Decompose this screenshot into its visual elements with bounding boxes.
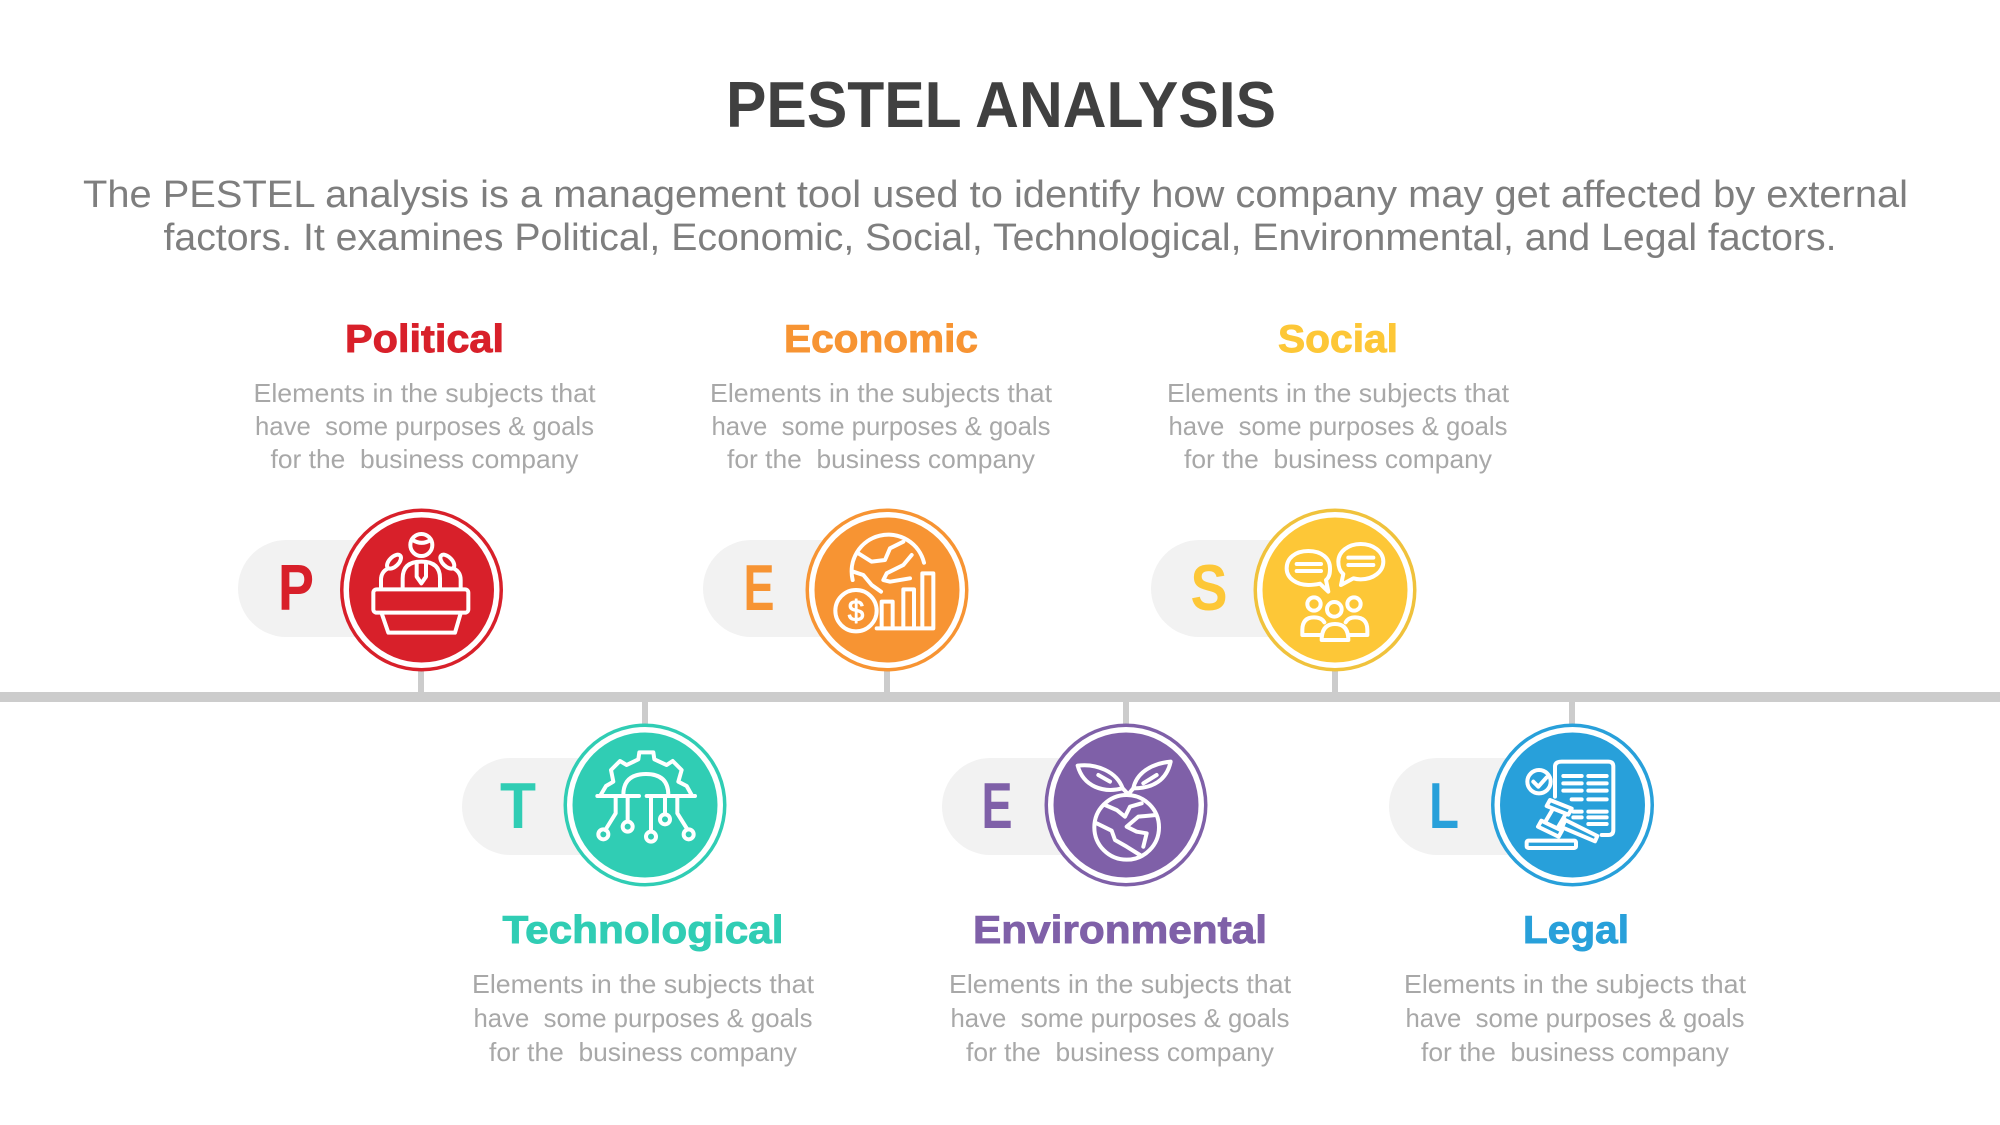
subtitle paragraph xyxy=(83,174,1908,259)
description: Legal: have some purposes & goals xyxy=(1406,1003,1744,1033)
panel: Economic xyxy=(703,318,1053,672)
description: Legal xyxy=(1404,969,1747,1067)
description: Technological: for the business company xyxy=(489,1037,797,1067)
title: PESTEL ANALYSIS xyxy=(726,68,1276,141)
letter pill: P xyxy=(238,540,478,637)
icon: speaker at podium xyxy=(340,508,503,672)
panel: Technological xyxy=(462,724,815,1067)
icon: globe, dollar coin and bars xyxy=(806,508,968,672)
panel: Political xyxy=(238,318,596,672)
heading: Social: Social xyxy=(1278,318,1398,361)
letter pill: T: T xyxy=(500,769,536,842)
letter pill: S xyxy=(1151,540,1391,637)
letter pill: P: P xyxy=(278,551,314,624)
description: Economic: Elements in the subjects that xyxy=(710,378,1053,408)
description: Political: Elements in the subjects that xyxy=(254,378,596,408)
letter pill: E: E xyxy=(744,551,774,624)
heading: Environmental: Environmental xyxy=(973,909,1267,952)
letter pill: L: L xyxy=(1429,769,1459,842)
description: Environmental: for the business company xyxy=(966,1037,1274,1067)
description: Technological xyxy=(472,969,815,1067)
description: Environmental: Elements in the subjects that xyxy=(949,969,1292,999)
heading: Economic: Economic xyxy=(784,318,978,361)
description: Political: have some purposes & goals xyxy=(255,411,594,441)
letter pill: E xyxy=(942,758,1182,855)
subtitle paragraph: factors. It examines Political, Economic, Social, Technological, Environmental, and Legal factors. xyxy=(164,217,1836,259)
description: Legal: Elements in the subjects that xyxy=(1404,969,1747,999)
letter pill: E: E xyxy=(982,769,1012,842)
heading: Political: Political xyxy=(345,318,504,361)
icon: gear with circuit xyxy=(564,724,726,886)
panel: Environmental xyxy=(942,724,1292,1067)
description: Economic: have some purposes & goals xyxy=(712,411,1050,441)
panel: Social xyxy=(1151,318,1510,672)
icon: document with gavel xyxy=(1491,724,1654,886)
description: Technological: Elements in the subjects that xyxy=(472,969,815,999)
description: Social: for the business company xyxy=(1184,444,1492,474)
letter pill: L xyxy=(1389,758,1629,855)
icon: globe with leaves xyxy=(1044,724,1208,886)
letter pill: S: S xyxy=(1190,551,1228,624)
description: Legal: for the business company xyxy=(1421,1037,1729,1067)
letter pill: E xyxy=(703,540,943,637)
description: Social: Elements in the subjects that xyxy=(1167,378,1510,408)
panel: Legal xyxy=(1389,724,1747,1067)
icon: speech bubbles and people xyxy=(1254,508,1416,672)
description: Environmental xyxy=(949,969,1292,1067)
description: Economic: for the business company xyxy=(727,444,1035,474)
description: Economic xyxy=(710,378,1053,474)
description: Social xyxy=(1167,378,1510,474)
description: Social: have some purposes & goals xyxy=(1168,411,1508,441)
description: Political xyxy=(254,378,596,474)
timeline axis xyxy=(0,668,2000,726)
heading: Legal: Legal xyxy=(1523,909,1629,952)
description: Political: for the business company xyxy=(270,444,578,474)
description: Technological: have some purposes & goals xyxy=(474,1003,812,1033)
letter pill: T xyxy=(462,758,702,855)
subtitle paragraph: The PESTEL analysis is a management tool used to identify how company may get affected by external xyxy=(83,174,1908,216)
heading: Technological: Technological xyxy=(502,909,784,952)
icon: globe, dollar coin and bars: $ xyxy=(848,595,864,628)
description: Environmental: have some purposes & goals xyxy=(950,1003,1290,1033)
